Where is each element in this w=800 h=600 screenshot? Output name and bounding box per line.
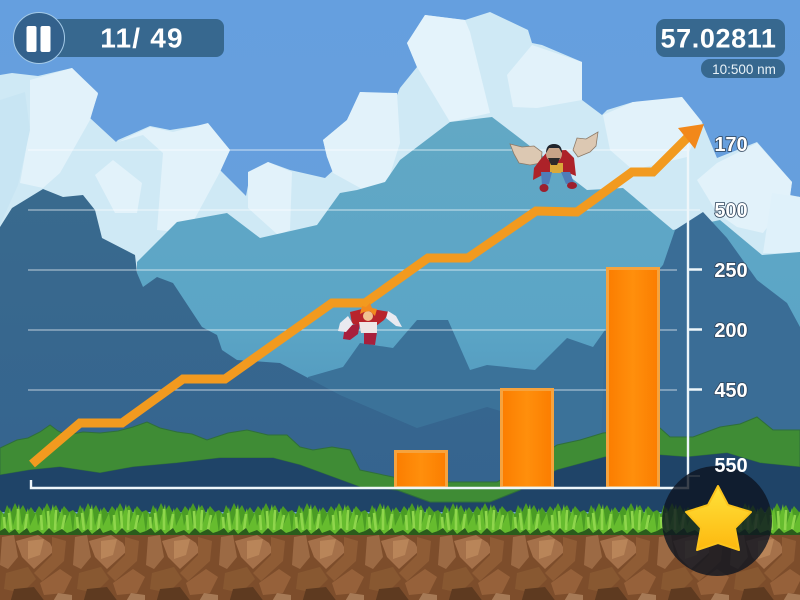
bar chart — [396, 268, 658, 488]
dirt ground — [0, 535, 800, 600]
axis labels: 500 — [714, 200, 748, 222]
pause and level counter — [14, 12, 224, 64]
axis labels — [714, 134, 748, 477]
axis labels: 170 — [714, 134, 748, 156]
score readout: 57.02811 — [661, 24, 776, 54]
character: flying hero — [338, 303, 402, 345]
green bushes — [0, 417, 800, 502]
pause and level counter: 11/ 49 — [100, 22, 184, 54]
axis labels: 200 — [714, 320, 748, 342]
dark right mountain — [600, 212, 800, 470]
teal mountain range — [137, 117, 800, 470]
score readout: 10:500 nm — [712, 62, 776, 77]
chart axes — [31, 144, 702, 488]
character: winged brawler — [510, 132, 598, 192]
centre blue hills — [300, 265, 663, 490]
grass strip — [0, 500, 800, 538]
dark left mountains — [0, 189, 520, 490]
icon: star — [686, 486, 751, 550]
score readout — [656, 19, 785, 78]
star button — [662, 466, 772, 576]
icy clouds — [0, 12, 800, 330]
axis labels: 250 — [714, 260, 748, 282]
axis labels: 450 — [714, 380, 748, 402]
navy lowland base — [0, 488, 800, 512]
axis labels: 550 — [714, 455, 748, 477]
grid lines — [28, 150, 700, 390]
navy lowland band — [0, 453, 800, 490]
icon: pause — [26, 26, 50, 52]
rising trend line arrow — [32, 124, 704, 464]
